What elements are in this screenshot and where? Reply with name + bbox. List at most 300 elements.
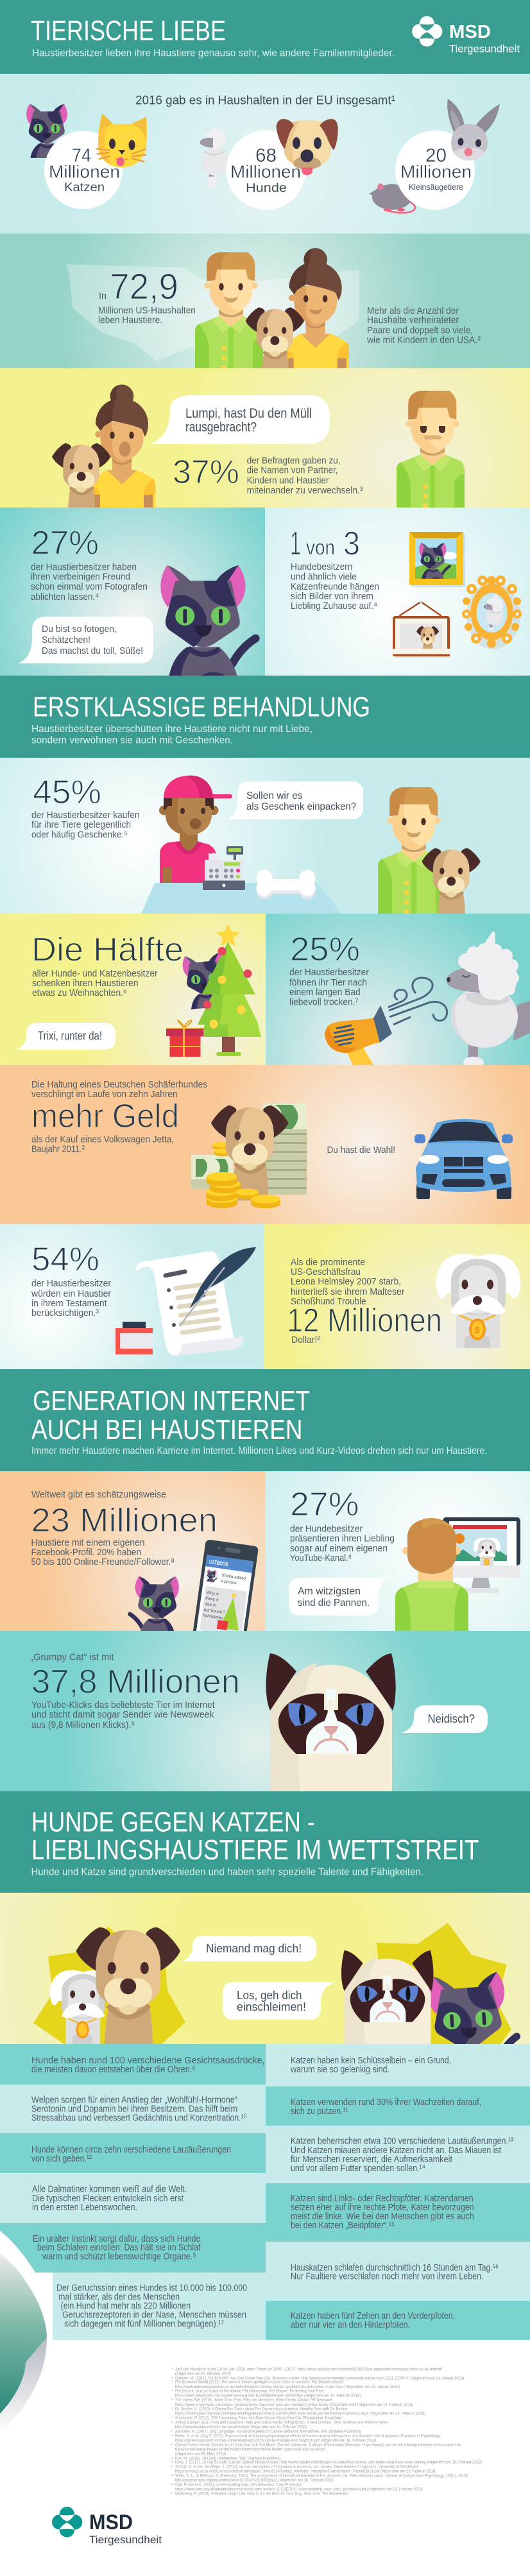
references: 1 — [171, 2367, 173, 2370]
fact: grooming: Katzen verwenden rund 30% ihrer Wachzeiten darauf, — [291, 2097, 481, 2108]
illustration: monitor with video — [443, 1517, 520, 1593]
speech bubble: fotogen — [18, 617, 153, 663]
text block: pictures explanation: Katzenfreunde hängen — [291, 581, 379, 592]
text block: YouTube explanation: YouTube-Kanal.⁸ — [290, 1553, 352, 1564]
stat: 72,9 million US households: In — [99, 291, 107, 302]
illustration: cat — [130, 1576, 179, 1634]
text block: christmas explanation: schenken ihren Haustieren — [32, 978, 139, 989]
stat: 72,9 million US households: 72,9 — [110, 266, 178, 307]
text block: pictures explanation: Liebling Zuhause auf.⁴ — [291, 601, 377, 611]
label: 74 Millionen Katzen — [49, 145, 120, 194]
illustration: customer and dog — [378, 787, 481, 920]
illustration: annoyed man — [397, 391, 465, 523]
references: Cats Protection. (2013). Understanding your cat's behaviour. Cats Protection. — [175, 2483, 303, 2487]
text block: gifts explanation — [31, 810, 140, 840]
text block: testament explanation: würden ein Haustier — [31, 1288, 111, 1299]
illustration: person from behind — [395, 1518, 468, 1642]
label: 68 Millionen Hunde — [230, 145, 301, 195]
text block: 37% explanation: die Namen von Partner, — [247, 465, 338, 476]
text: Dollar: Dollar!² — [291, 1335, 320, 1345]
illustration: phone with Catbook — [191, 1539, 259, 1656]
illustration: Maltese dog with medallion — [436, 1254, 520, 1348]
subtitle — [31, 724, 312, 746]
stat: 45%: 45% — [33, 774, 101, 811]
speech bubble: Niemand mag dich: Niemand mag dich! — [206, 1942, 302, 1955]
heading — [31, 1806, 479, 1866]
text block: Facebook explanation: Haustiere mit einem eigenen — [31, 1537, 145, 1548]
illustration: woman speaking — [93, 384, 155, 520]
stat: 1 von 3: von — [306, 536, 335, 559]
text block: Volkswagen Jetta: als der Kauf eines Volkswagen Jetta, — [31, 1134, 174, 1145]
fact: collarbone — [266, 2044, 530, 2086]
references: 14 — [171, 2464, 174, 2468]
illustration: woman — [287, 248, 349, 384]
subtitle: sondern verwöhnen sie auch mit Geschenken. — [31, 735, 233, 746]
stat: 12 Millionen: 12 Millionen — [287, 1302, 442, 1340]
speech bubble: Geschenk einpacken: Sollen wir es — [246, 790, 303, 801]
label: 74 Millionen Katzen: Katzen — [64, 181, 105, 194]
fact: left and right pawed: Katzen sind Links- oder Rechtspföter. Katzendamen — [291, 2193, 474, 2204]
heading: EU 2016: 2016 gab es in Haushalten in der EU insgesamt¹ — [135, 94, 395, 108]
burst: dog side — [33, 1927, 185, 2044]
references: 6 — [171, 2407, 173, 2410]
text block: 37% explanation — [247, 456, 363, 496]
illustration: dark cat — [427, 1971, 519, 2077]
panel: photographer — [0, 508, 265, 677]
text block: YouTube clicks: aus (9,8 Millionen Klicks).⁸ — [31, 1719, 135, 1730]
references: Dr. Becker, K. (2010). A Dozen Fun Facts about Pet Ownership in America. Healthy Pets with Dr. Becker. — [175, 2407, 348, 2412]
panel: blow drying — [266, 914, 530, 1068]
stat: 37%: 37% — [173, 454, 239, 491]
fact: toes: Katzen haben fünf Zehen an den Vorderpfoten, — [291, 2310, 455, 2321]
panel: section header Hunde gegen Katzen — [0, 1791, 530, 1893]
illustration: phone with Catbook: 8 out of 10 cats like this — [207, 1635, 242, 1643]
text block: more than married couples: wie mit Kindern in den USA.² — [366, 335, 481, 346]
panel: Facebook profiles — [0, 1471, 265, 1656]
references: Wells, D. L., & Millsopp, S. (February, 2012). The ontogenesis of lateralized behavior in the domestic cat, Felis silvestris catus. Journal of Comparative Psychology, 126(1), 23-30. — [175, 2474, 469, 2478]
text block: testament explanation — [31, 1278, 111, 1318]
text block: christmas explanation: etwas zu Weihnachten.⁶ — [32, 987, 127, 998]
fact: collarbone: Katzen haben kein Schlüsselbein – ein Grund, — [291, 2055, 451, 2066]
references: Pet Secure. (n.d.) A Guide to Worldwide Pet Ownership. Pet Secure. Protecting Your Pets. — [175, 2389, 325, 2394]
panel: section header Generation Internet — [0, 1369, 530, 1471]
text block: YouTube explanation: präsentieren ihren Liebling — [290, 1533, 395, 1544]
text block: gifts explanation: für ihre Tiere gelegentlich — [31, 819, 131, 830]
illustration: gift — [166, 1020, 203, 1057]
illustration: phone with Catbook: Why is — [206, 1591, 219, 1597]
references: (Abgerufen am 06. März 2018) — [175, 2452, 226, 2457]
fact: puppies and hormones: Stressabbau und verbessert Gedächtnis und Konzentration.¹⁰ — [31, 2113, 247, 2124]
speech bubble: fotogen: Schätzchen! — [42, 635, 90, 645]
references: http://www.petbusinessworld.co.uk/news/feed/pet-census-shines-spotlight-on-pets-roles-in-our-lives (Abgerufen am 15. Januar 2018) — [175, 2385, 400, 2389]
fact: curling up: Ein uralter Instinkt sorgt dafür, dass sich Hunde — [33, 2233, 200, 2244]
text block: pictures explanation: Hundebesitzern — [291, 561, 353, 572]
references: 7 — [171, 2416, 173, 2419]
heading: HUNDE GEGEN KATZEN - — [31, 1806, 315, 1838]
speech bubble: Geschenk einpacken — [227, 781, 363, 819]
icon: framed dog picture — [393, 601, 450, 658]
heading: GENERATION INTERNET — [33, 1385, 310, 1417]
fact: meowing: für Menschen reserviert, die Aufmerksamkeit — [291, 2154, 453, 2165]
panel: section header Erstklassige Behandlung — [0, 676, 530, 758]
icon: ornate mirror with poodle — [462, 576, 522, 649]
speech bubble: Los, geh dich einschleimen: einschleimen! — [237, 2000, 306, 2013]
references: Fox, M. (1978). The Dog. Wenatchee, WA: Dogwise Publishing — [175, 2457, 280, 2461]
illustration: cat behind tree — [182, 952, 233, 1010]
subtitle: Hunde und Katze sind grundverschieden und haben sehr spezielle Talente und Fähigkeiten. — [31, 1867, 423, 1878]
references: https://genesissquared.com/wp-content/uploads/2015/11/Pet-Therapy-and-Oxytocin.pdf (Abgerufen am 16. Februar 2018) — [175, 2439, 376, 2443]
text block: YouTube explanation — [290, 1523, 395, 1564]
references — [171, 2367, 482, 2496]
heading: AUCH BEI HAUSTIEREN — [31, 1414, 303, 1446]
fact: puppies and hormones: Welpen sorgen für einen Anstieg der „Wohlfühl-Hormone“ — [31, 2095, 237, 2106]
icon: ink bottle — [115, 1322, 153, 1354]
references: Pet Business World (2011). Pet census shines spotlight on pets' roles in our lives. Pet BusinessWorld. — [175, 2380, 345, 2385]
icon: rat — [369, 183, 415, 213]
references: 4 — [171, 2389, 173, 2392]
text block: YouTube explanation: sogar auf einem eigenen — [290, 1543, 388, 1554]
fact: Dalmatians — [0, 2173, 266, 2223]
text block: Facebook explanation: Facebook-Profil. 20% haben — [31, 1547, 141, 1558]
panel: testament — [0, 1224, 264, 1369]
text block: more than married couples: Mehr als die Anzahl der — [367, 305, 459, 316]
illustration: coins — [206, 1172, 280, 1208]
references: 5 — [171, 2398, 173, 2401]
panel: dogs versus cats — [0, 1893, 530, 2077]
fact: facial expressions: die meisten davon entstehen über die Ohren.⁹ — [31, 2064, 195, 2075]
panel: dog facts — [0, 2044, 266, 2340]
illustration: christmas tree — [198, 924, 261, 1056]
references: tutes/cornell-feline-health-center/health-information/feline-health-topics/cats-lick-too-much — [175, 2448, 325, 2452]
fact: sleeping — [266, 2242, 530, 2301]
panel: cat facts — [266, 2044, 530, 2340]
panel: christmas presents — [0, 914, 266, 1065]
text block: 37% explanation: Kindern und Haustier — [247, 475, 329, 486]
illustration: phone with Catbook: Sheila added — [221, 1573, 246, 1581]
panel: EU pet counts — [0, 74, 530, 234]
text block: blow dry explanation: einem langen Bad — [289, 987, 361, 998]
stat: 1 von 3 — [290, 525, 360, 563]
icon: bone — [257, 870, 316, 900]
text block: pictures explanation: sich Bilder von ihrem — [291, 591, 373, 602]
fact: sleeping: Nur Faultiere verschlafen noch mehr von ihrem Leben. — [291, 2271, 483, 2282]
label: 68 Millionen Hunde: Millionen — [230, 162, 301, 182]
label: 20 Millionen Kleinsäugetiere: Kleinsäugetiere — [409, 182, 463, 192]
references: https://www.cats.org.uk/uploads/documents/cat-care-leaflets-2013/EG09_Understanding_your_cat's_behaviour.pdf (Abgerufen am 16. Februar 2018) — [175, 2487, 423, 2492]
speech bubble: Trixi: Trixi, runter da! — [38, 1030, 102, 1043]
illustration: phone with Catbook: there a — [205, 1596, 219, 1603]
text block: Helmsley story — [291, 1257, 405, 1307]
illustration: Grumpy Cat — [266, 1653, 396, 1796]
stat: Die Hälfte: Die Hälfte — [31, 932, 184, 969]
text block: YouTube explanation: der Hundebesitzer — [290, 1523, 363, 1535]
speech bubble: Lumpi: rausgebracht? — [185, 420, 257, 435]
logo: MSD Tiergesundheit, footer: Tiergesundheit — [89, 2534, 162, 2546]
fact: left and right pawed: meist die linke. Wie bei den Menschen gibt es auch — [291, 2211, 474, 2222]
fact: facial expressions — [0, 2044, 266, 2085]
illustration: dog — [211, 1105, 289, 1200]
stat: 72,9 million US households — [98, 266, 196, 326]
stat: 37,8 Millionen: 37,8 Millionen — [31, 1664, 240, 1701]
subtitle: Haustierbesitzer überschütten ihre Haustiere nicht nur mit Liebe, — [31, 724, 312, 735]
fact: left and right pawed: bei den Katzen „Beidpföter“.¹⁵ — [291, 2220, 395, 2231]
fact: meowing: und vor allem Futter spenden sollen.¹⁴ — [291, 2163, 425, 2174]
illustration: dark cat — [160, 565, 255, 677]
text block: photographer explanation: ihren vierbeinigen Freund — [31, 572, 130, 583]
text block: photographer explanation: ablichten lassen.⁴ — [31, 592, 99, 602]
text: Du hast die Wahl: Du hast die Wahl! — [327, 1145, 395, 1156]
fact: curling up — [0, 2223, 266, 2273]
panel: name mix-up — [0, 368, 530, 523]
illustration: small Maltese — [50, 1970, 116, 2044]
stat: 27%: 27% — [290, 1486, 359, 1523]
text block: testament explanation: in ihrem Testament — [31, 1298, 107, 1309]
illustration: phone with Catbook: a picture. — [221, 1579, 238, 1586]
fact: vocalizations: von sich geben.¹² — [31, 2153, 92, 2164]
illustration: phone with Catbook: #christmas — [203, 1614, 224, 1621]
references: Galante, M. (2011). For $40,000, You Can Clone Your Cat. Business Insider. http://www.businessinsider.com/weird-animal-facts-2011-12?IR=T (Abgerufen am 14. Januar 2018) — [175, 2376, 464, 2381]
logo: MSD Tiergesundheit, white — [412, 16, 520, 55]
text: Grumpy Cat ist mit: „Grumpy Cat“ ist mit — [30, 1651, 114, 1663]
label: 74 Millionen Katzen: Millionen — [49, 162, 120, 182]
references: Schötz, S. & Van de Weijer, J. (2014). Human perception of intonation in domestic cat meows. Department of Linguistics, University of Stockholm. — [175, 2465, 419, 2469]
fact: left and right pawed — [266, 2183, 530, 2242]
references: The Harris Poll. (2016). More Than Ever, Pets are Members of the Family. Cision, PR Newswire. — [175, 2398, 334, 2403]
speech bubble: Pannen — [289, 1578, 389, 1616]
stat: 72,9 million US households: leben Haustiere. — [98, 315, 162, 326]
fact: grooming — [266, 2086, 530, 2126]
logo: MSD Tiergesundheit, footer — [52, 2507, 162, 2546]
counter — [141, 883, 342, 914]
illustration: poodle — [447, 931, 530, 1068]
panel: YouTube channel — [265, 1471, 530, 1642]
stat: 54%: 54% — [31, 1241, 99, 1278]
panel: pictures of pets — [265, 508, 530, 676]
decorative arc: giant logo fragment — [0, 2231, 53, 2576]
text block: photographer explanation: der Haustierbesitzer haben — [31, 562, 137, 573]
references: 16 — [171, 2482, 174, 2486]
text block: blow dry explanation: liebevoll trocken.⁷ — [289, 996, 358, 1007]
text block: 37% explanation: miteinander zu verwechseln.³ — [247, 485, 363, 496]
label: 68 Millionen Hunde: Hunde — [246, 182, 287, 195]
text block: christmas explanation: aller Hunde- und Katzenbesitzer — [32, 968, 158, 979]
text block: blow dry explanation: föhnen ihr Tier nach — [289, 977, 367, 988]
references: https://healthypets.mercola.com/sites/healthypets/archive/2010/09/02/fun-facts-about-pet-ownership-in-america.aspx (Abgerufen am 14. Februar 2018) — [175, 2412, 425, 2416]
references: 2 — [171, 2376, 173, 2379]
fact: Dalmatians: Alle Dalmatiner kommen weiß auf die Welt. — [32, 2184, 187, 2195]
speech bubble: Lumpi: Lumpi, hast Du den Müll — [185, 406, 312, 421]
references: Abrantes, R. (1997). Dog Language - An Encyclopedia Of Canine Behavior. Wenatchee, WA: Dogwise Publishing — [175, 2430, 361, 2434]
illustration: big dog — [76, 1927, 180, 2056]
text block: Facebook explanation — [31, 1537, 175, 1567]
text block: gifts explanation: oder häufig Geschenke.⁵ — [31, 830, 128, 840]
references: 10 — [171, 2434, 174, 2437]
illustration: phone with Catbook: tree in — [204, 1602, 217, 1608]
fact: sense of smell: Geruchsrezeptoren in der Nase, Menschen müssen — [62, 2310, 246, 2321]
speech bubble: Los, geh dich einschleimen — [223, 1982, 336, 2020]
text block: pictures explanation — [291, 561, 379, 611]
label: 68 Millionen Hunde: 68 — [255, 145, 277, 166]
references: 11 — [171, 2443, 174, 2446]
circle: dogs — [226, 119, 338, 210]
references: 12 — [171, 2456, 174, 2459]
icon: framed cat picture — [409, 532, 465, 587]
fact: vocalizations: Hunde können circa zehn verschiedene Lautäußerungen — [31, 2144, 231, 2155]
text block: photographer explanation — [31, 562, 148, 602]
speech bubble: fotogen: Du bist so fotogen, — [42, 624, 117, 635]
text block: Volkswagen Jetta: Baujahr 2011.² — [31, 1144, 85, 1155]
text block: cost intro: Die Haltung eines Deutschen Schäferhundes — [31, 1079, 207, 1090]
label: 74 Millionen Katzen: 74 — [72, 145, 91, 166]
text block: testament explanation: berücksichtigen.³ — [31, 1308, 99, 1318]
references: https://www.petsecure.com.au/pet-care/a-guide-to-worldwide-pet-ownership/ (Abgerufen am 14. Februar 2018) — [175, 2394, 361, 2398]
speech bubble: Pannen: Am witzigsten — [298, 1586, 361, 1597]
stat: 27%: 27% — [31, 525, 99, 562]
fact: Dalmatians: Die typischen Flecken entwickeln sich erst — [32, 2193, 184, 2204]
text block: cost intro — [31, 1079, 207, 1100]
illustration: phone with Catbook: CATBOOK — [209, 1558, 229, 1567]
icon: dark cat behind circle — [26, 104, 73, 158]
fact: puppies and hormones — [0, 2085, 266, 2133]
logo: MSD Tiergesundheit, white: Tiergesundheit — [449, 42, 520, 55]
text block: blow dry explanation: der Haustierbesitzer — [289, 967, 369, 978]
fact: facial expressions: Hunde haben rund 100 verschiedene Gesichtsausdrücke, — [31, 2055, 264, 2066]
icon: feather — [180, 1247, 256, 1326]
speech bubble: Los, geh dich einschleimen: Los, geh dich — [237, 1989, 302, 2002]
speech bubble: Niemand mag dich — [181, 1936, 316, 1961]
text block: more than married couples: Paare und doppelt so viele, — [367, 325, 473, 336]
icon: cash register — [203, 846, 245, 890]
illustration: scroll — [135, 1251, 243, 1356]
text block: Helmsley story: US-Geschäftsfrau — [291, 1267, 361, 1277]
references: Zahl der Haustiere in der EU im Jahr 2016, nach Tierart (in 1000). (2017). https://www.statista.com/statistics/515010/pet-population-european-union-eu-by-animal/ — [175, 2367, 442, 2372]
text block: cost intro: verschlingt im Laufe von zehn Jahren — [31, 1089, 178, 1100]
stat: 1 von 3: 3 — [343, 525, 360, 563]
panel: cost of a dog — [0, 1065, 530, 1224]
stat: 25%: 25% — [290, 931, 360, 968]
illustration: blue car — [415, 1119, 513, 1199]
text block: testament explanation: der Haustierbesitzer — [31, 1278, 111, 1289]
fact: grooming: sich zu putzen.¹¹ — [291, 2106, 348, 2117]
illustration: phone with Catbook: our house? — [203, 1608, 225, 1615]
circle: small mammals — [395, 99, 500, 210]
map: USA silhouette — [66, 264, 359, 361]
title: Tierische Liebe: TIERISCHE LIEBE — [31, 15, 226, 46]
subtitle: Haustierbesitzer lieben ihre Haustiere genauso sehr, wie andere Familienmitglieder. — [32, 47, 395, 59]
icon: yellow cat head — [96, 114, 147, 167]
label: 20 Millionen Kleinsäugetiere: 20 — [425, 145, 447, 166]
fact: meowing — [266, 2126, 530, 2183]
references: 15 — [171, 2473, 174, 2477]
speech bubble: Lumpi — [150, 395, 330, 444]
heading — [31, 1385, 310, 1446]
text block: gifts explanation: der Haustierbesitzer kaufen — [31, 810, 140, 821]
speech bubble: Pannen: sind die Pannen. — [298, 1598, 370, 1608]
references: 9 — [171, 2429, 173, 2432]
text block: YouTube clicks: und sticht damit sogar Sender wie Newsweek — [31, 1709, 214, 1720]
icon: poodle — [200, 128, 230, 188]
icon: rabbit head — [447, 99, 500, 160]
speech bubble: Trixi — [16, 1023, 115, 1050]
references: Kelly, J. (2017). 10 Cat Sounds. Catster. Belvoir Media Groups. http://www.catster.com/lifestyle/cat-behavior-sounds-cats-make-what-they-mean-talking (Abgerufen am 16. Februar 2018) — [175, 2461, 482, 2465]
text block: pictures explanation: und ähnlich viele — [291, 572, 357, 583]
stat: mehr Geld: mehr Geld — [31, 1098, 179, 1135]
burst: cat side — [377, 1923, 511, 2044]
illustration: dog — [52, 443, 110, 515]
text block: more than married couples — [366, 305, 481, 346]
fact: vocalizations — [0, 2133, 266, 2173]
text block: more than married couples: Haushalte verheirateter — [367, 315, 459, 326]
text block: christmas explanation — [32, 968, 158, 998]
text block: 37% explanation: der Befragten gaben zu, — [247, 456, 341, 466]
illustration: Grumpy Cat — [341, 1950, 433, 2052]
fact: sense of smell: (ein Hund hat mehr als 220 Millionen — [61, 2301, 191, 2312]
speech bubble: Geschenk einpacken: als Geschenk einpacken? — [246, 801, 356, 812]
fact: puppies and hormones: Serotonin und Dopamin bei ihren Besitzern. Das hilft beim — [31, 2104, 237, 2115]
fact: collarbone: warum sie so gelenkig sind. — [290, 2064, 389, 2075]
illustration: hair dryer — [325, 1005, 392, 1068]
references: (Abgerufen am 10. Oktober 2017) — [175, 2372, 231, 2376]
text block: YouTube clicks: YouTube-Klicks das beliebteste Tier im Internet — [31, 1700, 215, 1710]
panel: US households — [0, 234, 530, 384]
text block: Helmsley story: Schoßhund Trouble — [291, 1296, 366, 1307]
references: Scottsdale, P. (2012). 365 Fascinating Facts You Didn't Know About Your Cat. Philadelphia: BookBaby — [175, 2416, 343, 2421]
illustration: shop clerk — [159, 776, 232, 883]
fact: Dalmatians: in den ersten Lebenswochen. — [32, 2202, 137, 2213]
text block: Helmsley story: Leona Helmsley 2007 starb, — [291, 1276, 401, 1287]
fact: sense of smell: mal stärker, als der des Menschen — [58, 2292, 180, 2303]
heading: ERSTKLASSIGE BEHANDLUNG — [33, 692, 370, 722]
references: Beetz, A. et al. (July 9, 2012). Psychosocial and psychophysiological effects of human-animal interactions: the possible role of oxytocin. Frontiers in Psychology. — [175, 2434, 441, 2439]
stat: 1 von 3: 1 — [290, 525, 301, 563]
references: 17 — [171, 2491, 174, 2495]
illustration: money stack — [191, 1104, 307, 1195]
panel: gifts — [0, 758, 530, 920]
text block: Helmsley story: Als die prominente — [291, 1257, 365, 1268]
references: http://person2.sol.lu.se/SusanneSchotz/Publications_files/2014/Schotz_vdWeijer_PerceptionCatIntonation_Fonetik2014.pdf (Abgerufen am 16. Februar 2018) — [175, 2469, 436, 2474]
references: Cornell Feline Health Center. (n.d.) Cats that Lick Too Much. Cornell University. College of Veterinary Medicine. https://www2.vet.cornell.edu/departments-centers-and-insti — [175, 2443, 461, 2448]
fact: sense of smell: sich dagegen mit fünf Millionen begnügen).¹⁷ — [64, 2319, 224, 2330]
circle: cats — [44, 114, 147, 209]
icon: brown dog head — [277, 119, 338, 175]
text block: Facebook explanation: 50 bis 100 Online-Freunde/Follower.⁸ — [31, 1557, 175, 1567]
text: Weltweit: Weltweit gibt es schätzungsweise — [31, 1489, 166, 1500]
speech bubble: fotogen: Das machst du toll, Süße! — [42, 645, 143, 656]
logo: MSD Tiergesundheit, footer: MSD — [89, 2511, 133, 2534]
fact: sense of smell — [53, 2273, 266, 2340]
references: 3 — [171, 2380, 173, 2383]
stat: 72,9 million US households: Millionen US-Haushalten — [98, 305, 196, 316]
panel: Grumpy Cat — [0, 1631, 530, 1796]
references: A New Domain. (n.d.) Fido and Facebook: Pets and Social Media (Infographic). A New Domain. Tech, Science and Political News. — [175, 2421, 389, 2425]
fact: curling up: beim Schlafen einrollen: Das hält sie im Schlaf — [37, 2242, 201, 2253]
label: 20 Millionen Kleinsäugetiere: Millionen — [400, 162, 472, 182]
speech bubble: Neidisch — [401, 1705, 488, 1733]
text block: Helmsley story: hinterließ sie ihrem Malteser — [291, 1286, 405, 1297]
illustration: man — [195, 252, 263, 384]
stat: 23 Millionen: 23 Millionen — [31, 1502, 218, 1539]
text block: Volkswagen Jetta — [31, 1134, 174, 1155]
fact: curling up: warm und schützt lebenswichtige Organe.⁹ — [42, 2251, 196, 2262]
text block: blow dry explanation — [289, 967, 369, 1007]
references: 13 — [171, 2460, 174, 2463]
fact: toes — [266, 2301, 530, 2340]
icon: air stream — [388, 978, 447, 1025]
text block: photographer explanation: schon einmal vom Fotografen — [31, 581, 148, 592]
fact: left and right pawed: setzen eher auf ihre rechte Pfote, Kater bevorzugen — [291, 2202, 474, 2213]
fact: toes: aber nur vier an den Hinterpfoten. — [291, 2319, 410, 2330]
references: http://psycnet.apa.org/doiLanding?doi=10.1037%2Fa0026522 (Abgerufen am 16. Februar 2018) — [175, 2478, 334, 2483]
